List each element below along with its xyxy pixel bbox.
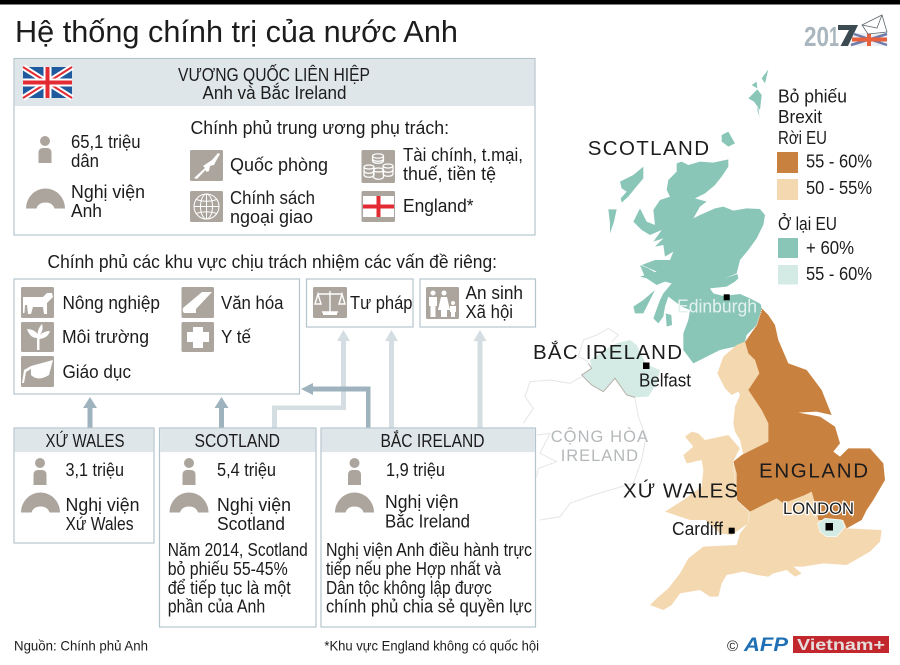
panel: Scotland: SCOTLAND [194, 431, 280, 451]
item: environment [21, 322, 149, 352]
panel heading: Anh và Bắc Ireland [202, 82, 346, 103]
map: England and Wales regions [582, 308, 885, 610]
item: foreign policy: ngoại giao [230, 207, 313, 227]
text: Scotland note: phần của Anh [168, 596, 265, 616]
map label: Republic of Ireland: CỘNG HÒA [551, 427, 648, 446]
parliament: Anh [71, 201, 102, 221]
panel: United Kingdom [14, 58, 535, 235]
panel heading: VƯƠNG QUỐC LIÊN HIỆP [178, 64, 370, 85]
panel: Northern Ireland: BẮC IRELAND [380, 430, 484, 451]
logo: 2017 election [804, 15, 887, 52]
map [523, 69, 885, 610]
legend: remain over 60 [778, 238, 854, 258]
population: dân [71, 151, 99, 171]
item: foreign policy: Chính sách [230, 188, 315, 208]
arrow: Northern Ireland to social security [474, 330, 486, 428]
credit: AFP and Vietnam+ [727, 635, 889, 656]
legend: remain over 60: + 60% [806, 238, 854, 258]
parliament [26, 182, 145, 221]
icon: family [426, 287, 459, 319]
item: culture [182, 287, 284, 318]
item: England [362, 191, 474, 222]
map label: Edinburgh: Edinburgh [677, 296, 757, 316]
panel: Northern Ireland: Nghị viện [385, 492, 458, 512]
logo: 2017 election: 1 [829, 21, 839, 52]
panel: Wales: Xứ Wales [66, 514, 134, 534]
arrow: Northern Ireland to justice [385, 330, 398, 428]
panel: social security: Xã hội [466, 302, 513, 322]
panel: Northern Ireland: 1,9 triệu [386, 460, 445, 480]
credit: AFP and Vietnam+: Vietnam+ [797, 637, 885, 654]
legend heading: leave: Brexit [778, 107, 822, 127]
panel: Scotland: 5,4 triệu [217, 460, 276, 480]
item: health: Y tế [221, 327, 251, 347]
panel: devolved matters [14, 279, 300, 394]
item: finance: thuế, tiền tệ [403, 164, 496, 184]
text: Northern Ireland note: Nghị viện Anh điều hành trực [326, 540, 532, 560]
text: Northern Ireland note: chính phủ chia sẻ quyền lực [326, 596, 532, 616]
map: Republic of Ireland outline [523, 328, 646, 520]
logo: 2017 election: 20 [804, 21, 829, 52]
regional government heading: Chính phủ các khu vực chịu trách nhiệm các vấn đề riêng: [48, 252, 497, 272]
region: London [818, 518, 845, 537]
legend [777, 86, 872, 284]
region: Wales [665, 432, 750, 535]
item: education: Giáo dục [62, 362, 131, 382]
item: defence [190, 150, 328, 181]
population: 65,1 triệu [71, 132, 140, 152]
item: foreign policy [190, 188, 315, 227]
panel: Wales: Nghị viện [66, 495, 140, 515]
item: education [21, 356, 131, 387]
arrow: Scotland to justice [272, 330, 350, 428]
region: leave 55-60 [733, 308, 885, 528]
map label: England: ENGLAND [759, 460, 868, 482]
legend heading: remain: Ở lại EU [778, 213, 837, 234]
legend: leave 50-55 [777, 178, 872, 200]
panel: Scotland: Scotland [217, 514, 285, 534]
map: Scotland mainland [608, 159, 765, 363]
credit: AFP and Vietnam+: © [727, 638, 738, 655]
item: finance [362, 145, 523, 184]
arrow: Northern Ireland to devolved matters [301, 383, 370, 428]
map label: Republic of Ireland: IRELAND [561, 447, 638, 465]
map label: Cardiff: Cardiff [672, 519, 724, 539]
panel: Wales: 3,1 triệu [66, 460, 124, 480]
top bar [0, 0, 900, 4]
icon: scales [313, 287, 347, 318]
panel: Wales: XỨ WALES [46, 430, 124, 451]
map label: Belfast: Belfast [639, 370, 691, 390]
legend: leave 55-60 [777, 152, 872, 173]
footnote: *Khu vực England không có quốc hội [324, 638, 539, 654]
item: agriculture [21, 287, 160, 318]
map label: Wales: XỨ WALES [623, 480, 738, 502]
text: Scotland note: Năm 2014, Scotland [168, 540, 308, 560]
panel: Scotland [160, 428, 316, 627]
panel: social security: An sinh [466, 283, 523, 303]
panel: Northern Ireland: Bắc Ireland [385, 510, 470, 532]
item: defence: Quốc phòng [230, 155, 328, 175]
map: Scottish northern isles [722, 69, 768, 147]
item: finance: Tài chính, t.mại, [403, 145, 523, 165]
text: Scotland note: bỏ phiếu 55-45% [168, 559, 288, 579]
text: Scotland note: để tiếp tục là một [168, 578, 291, 598]
item: England: England* [403, 196, 474, 216]
arrow: Scotland to devolved matters [214, 397, 228, 428]
region: leave 50-55 north [717, 342, 768, 455]
legend heading: leave: Rời EU [778, 128, 827, 148]
map label: Northern Ireland: BẮC IRELAND [533, 340, 682, 364]
panel: Scotland: Nghị viện [217, 495, 291, 515]
item: environment: Môi trường [62, 327, 149, 347]
parliament: Nghị viện [71, 182, 145, 202]
central government heading: Chính phủ trung ương phụ trách: [190, 118, 449, 138]
legend: leave 55-60: 55 - 60% [806, 152, 872, 172]
text: Northern Ireland note: Dân tộc không lập được [326, 578, 492, 598]
source: Nguồn: Chính phủ Anh [14, 638, 148, 654]
credit: AFP and Vietnam+: AFP [743, 635, 788, 656]
map label: London [783, 499, 854, 530]
item: health [182, 322, 251, 352]
map label: Republic of Ireland [551, 427, 648, 465]
title: Hệ thống chính trị của nước Anh [15, 14, 458, 49]
panel: justice: Tư pháp [350, 293, 412, 313]
region: southern England [650, 492, 882, 610]
legend: remain 55-60: 55 - 60% [806, 264, 872, 284]
arrows [83, 330, 486, 428]
panel: social security [420, 279, 536, 327]
icon: UK flag [23, 67, 72, 98]
legend heading: leave: Bỏ phiếu [778, 86, 847, 106]
legend: remain 55-60 [778, 264, 872, 284]
item: culture: Văn hóa [221, 293, 284, 313]
map label: London: LONDON [783, 499, 854, 518]
panel: Northern Ireland [321, 428, 536, 627]
population [38, 132, 140, 171]
item: agriculture: Nông nghiệp [62, 293, 160, 313]
panel heading [178, 64, 370, 103]
panel: justice [306, 279, 413, 327]
text: Northern Ireland note: tiếp nếu phe Hợp nhất và [326, 559, 502, 579]
map label: Scotland: SCOTLAND [588, 137, 709, 160]
region: Northern Ireland [582, 340, 660, 397]
arrow: Wales to devolved matters [83, 397, 97, 428]
map label: Belfast [639, 362, 691, 390]
text: Scotland note [168, 540, 308, 616]
text: Northern Ireland note [326, 540, 532, 616]
panel: Wales [14, 428, 154, 543]
legend heading: leave [778, 86, 847, 148]
legend: leave 50-55: 50 - 55% [806, 178, 872, 198]
